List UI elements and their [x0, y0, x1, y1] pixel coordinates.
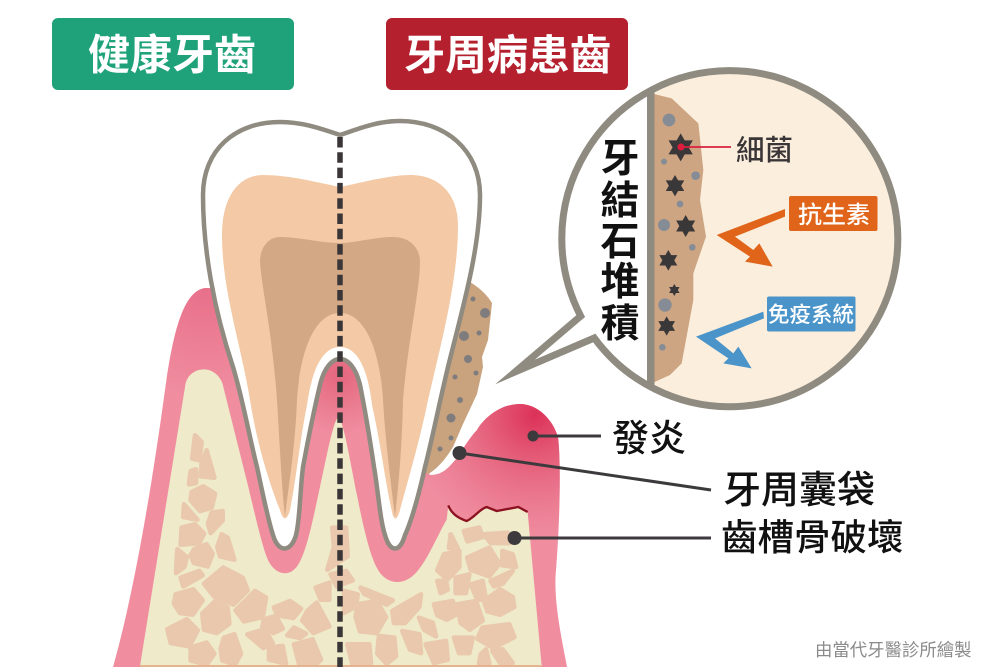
callout: alveolar bone destruction: 齒槽骨破壞	[721, 517, 904, 558]
vertical label: tartar buildup: 堆	[600, 261, 640, 304]
vertical label: tartar buildup: 牙	[600, 138, 640, 181]
magnified callout bubble	[515, 60, 910, 420]
title badge: periodontal disease tooth: 牙周病患齒	[404, 32, 611, 78]
bone marrow cells	[167, 435, 516, 665]
immune system label: 免疫系統	[768, 303, 854, 327]
title badge: healthy tooth: 健康牙齒	[88, 32, 256, 78]
dentin	[222, 175, 458, 519]
tartar layer	[652, 93, 706, 383]
bottom edge of bone	[140, 665, 541, 667]
cream background of zoomed area	[654, 74, 894, 404]
vertical label: tartar buildup: 積	[600, 303, 640, 346]
title badge: healthy tooth	[52, 18, 294, 90]
antibiotic label: 抗生素	[798, 202, 870, 229]
pulp	[260, 237, 420, 517]
immune system label	[767, 296, 856, 332]
credit text: 由當代牙醫診所繪製	[815, 640, 972, 660]
gum tissue	[113, 288, 567, 667]
tartar deposit on root	[420, 282, 492, 474]
dashed divider line	[337, 137, 343, 667]
callout: periodontal pocket: 牙周囊袋	[723, 470, 875, 512]
tartar particles and bacteria	[658, 114, 700, 351]
callout: inflammation: 發炎	[612, 418, 686, 459]
callout: inflammation	[528, 418, 686, 459]
vertical label: tartar buildup: 結	[600, 180, 640, 223]
tooth	[203, 121, 480, 548]
callout: periodontal pocket	[452, 446, 875, 512]
tooth surface bar	[647, 92, 654, 385]
immune system arrow	[696, 312, 764, 368]
antibiotic label	[789, 196, 878, 231]
vertical label: tartar buildup: 石	[600, 221, 640, 264]
bone destruction edge	[448, 505, 528, 521]
title badge: periodontal disease tooth	[386, 18, 628, 90]
callout: alveolar bone destruction	[508, 517, 904, 558]
enamel outline	[203, 121, 480, 548]
bacteria pointer and label	[678, 135, 793, 167]
bacteria pointer and label: 細菌	[736, 135, 793, 167]
alveolar bone	[140, 369, 542, 666]
vertical label: tartar buildup	[600, 138, 640, 346]
antibiotic arrow	[717, 209, 785, 267]
